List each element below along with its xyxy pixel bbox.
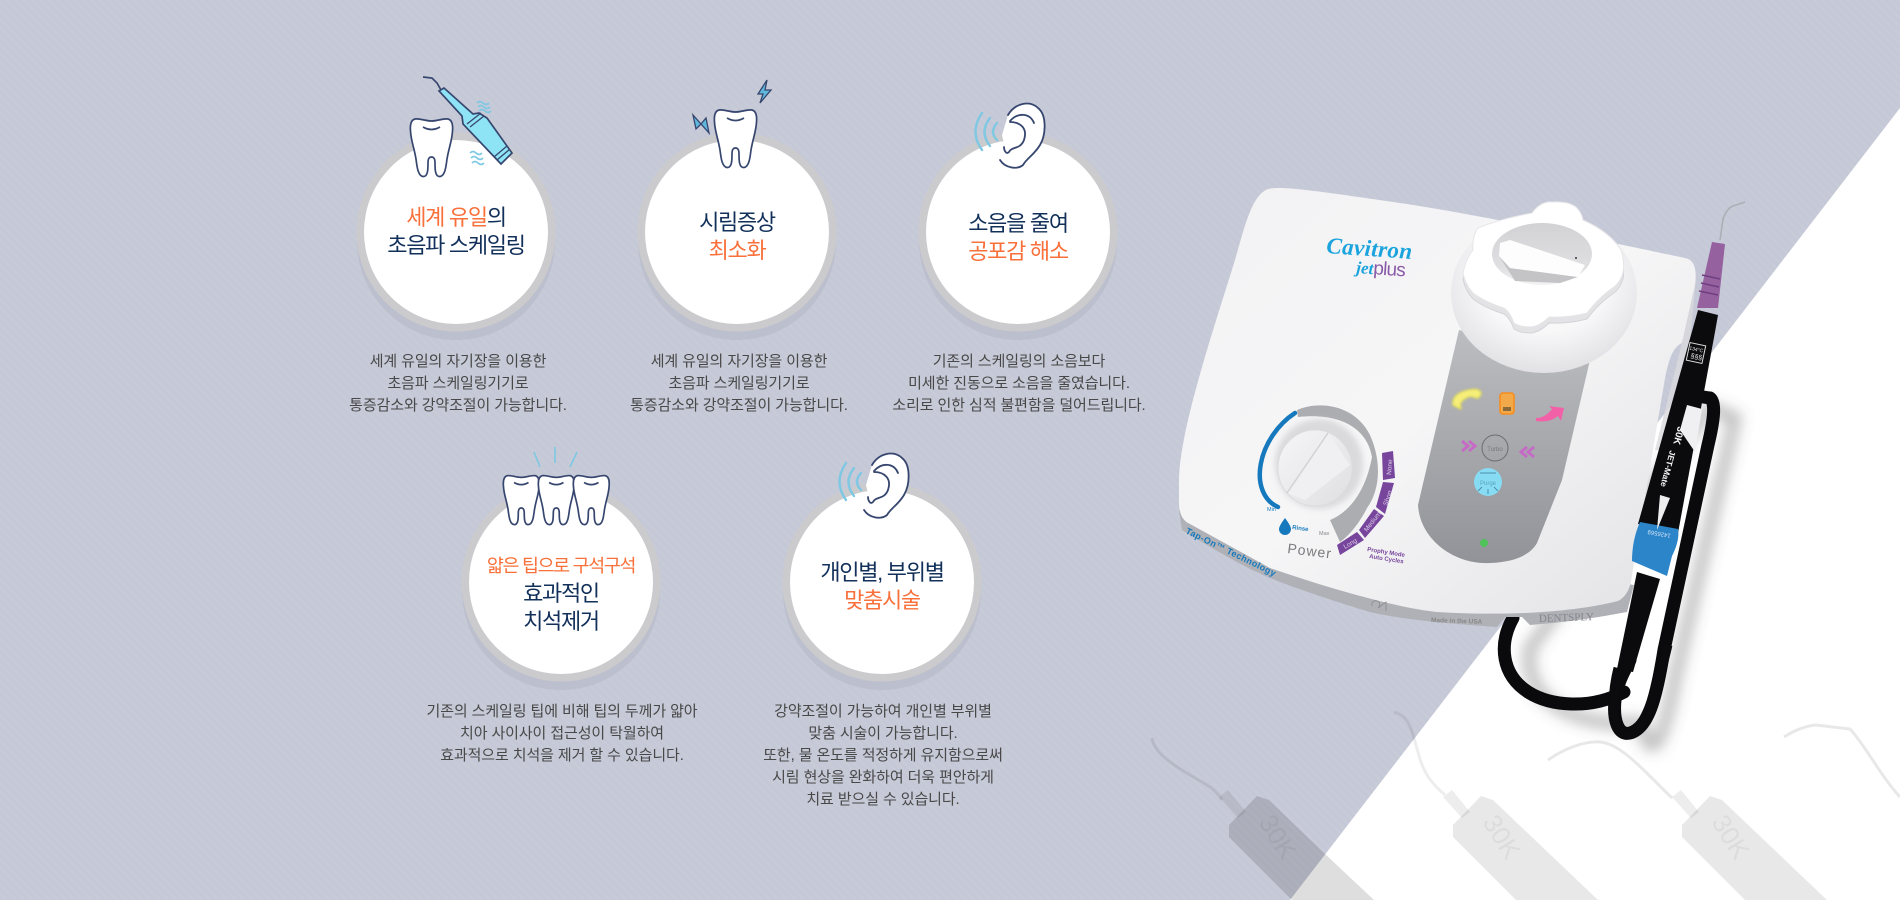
heading: circle 4: 효과적인 [523, 581, 599, 606]
text block: circle 1: 세계 유일의 자기장을 이용한 [370, 353, 546, 370]
power labels: Rinse [1292, 525, 1309, 533]
status indicators: Turbo [1487, 447, 1503, 453]
text block: circle 3: 기존의 스케일링의 소음보다 [933, 353, 1105, 370]
text block: circle 4 [426, 703, 698, 764]
segment labels: Medium [1363, 511, 1383, 533]
text block: circle 4: 기존의 스케일링 팁에 비해 팁의 두께가 얇아 [426, 703, 698, 720]
device base band [1179, 510, 1634, 627]
power labels: Auto Cycles [1369, 554, 1405, 566]
power labels [1184, 507, 1594, 626]
text block: circle 5: 맞춤 시술이 가능합니다. [808, 725, 958, 742]
text block: circle 5: 또한, 물 온도를 적정하게 유지함으로써 [763, 747, 1003, 764]
Cavitron logo: jetplus [1353, 257, 1406, 281]
power labels: Power [1287, 540, 1333, 561]
rear cable loop [1504, 396, 1714, 733]
segment labels: None [1386, 459, 1394, 475]
Cavitron logo: Cavitron [1326, 233, 1413, 264]
text block: circle 3: 미세한 진동으로 소음을 줄였습니다. [908, 375, 1130, 392]
knob handle [1499, 240, 1585, 283]
heading: circle 2 [699, 210, 776, 263]
circle 4 badge [462, 482, 660, 690]
heading: circle 3: 공포감 해소 [968, 239, 1068, 264]
power labels: Tap-On™ Technology [1184, 526, 1278, 578]
icon: ear with sound waves 2 [840, 454, 909, 518]
scaler 3: 30K [1706, 809, 1756, 865]
text block: circle 3: 소리로 인한 심적 불편함을 덜어드립니다. [892, 397, 1146, 414]
scaler 2 [1394, 712, 1598, 900]
heading: circle 5 [820, 560, 944, 613]
heading: circle 5: 맞춤시술 [844, 588, 920, 613]
circle 2 badge [638, 132, 836, 340]
power labels: Made in the USA [1431, 617, 1483, 626]
text block: circle 5: 치료 받으실 수 있습니다. [806, 791, 960, 808]
icon: tooth and scaler [410, 77, 512, 177]
text block: circle 4: 치아 사이사이 접근성이 탁월하여 [460, 725, 664, 742]
segment labels [1342, 459, 1394, 551]
text block: circle 3 [892, 353, 1146, 414]
heading: circle 1: 초음파 스케일링 [387, 233, 525, 258]
handpiece [1613, 202, 1745, 735]
circle 3 badge [918, 132, 1118, 340]
power dial [1275, 419, 1363, 509]
text block: circle 2: 통증감소와 강약조절이 가능합니다. [630, 397, 848, 414]
ghost scaler tips at bottom [1152, 712, 1900, 900]
knob skirt [1463, 208, 1624, 333]
right side translucent edge [1655, 270, 1697, 450]
grey control panel [1418, 330, 1590, 563]
heading: circle 4: 얇은 팁으로 구석구석 [487, 555, 635, 576]
text block: circle 1 [349, 353, 567, 414]
heading: circle 3: 소음을 줄여 [968, 211, 1068, 236]
Cavitron logo [1326, 233, 1413, 281]
text block: circle 2 [630, 353, 848, 414]
circle 1 badge [356, 132, 556, 340]
device body [1179, 188, 1696, 614]
knob inner well [1492, 223, 1592, 285]
text block: circle 1: 통증감소와 강약조절이 가능합니다. [349, 397, 567, 414]
heading: circle 2: 최소화 [709, 238, 765, 263]
scaler 3 [1548, 742, 1827, 900]
handpiece: §§§ [1690, 353, 1703, 362]
device: Cavitron Jet Plus [1179, 188, 1745, 735]
text block: circle 5: 시림 현상을 완화하여 더욱 편안하게 [772, 769, 994, 786]
heading: circle 5: 개인별, 부위별 [820, 560, 944, 585]
scaler 2: 30K [1477, 809, 1527, 865]
heading: circle 4: 치석제거 [523, 609, 599, 634]
knob [1463, 202, 1624, 327]
text block: circle 4: 효과적으로 치석을 제거 할 수 있습니다. [440, 747, 684, 764]
heading: circle 4 [487, 555, 635, 634]
heading: circle 1 [387, 205, 525, 258]
heading: circle 1: 세계 유일의 [406, 205, 506, 230]
handpiece: 30K [1670, 425, 1686, 447]
power labels: DENTSPLY [1539, 611, 1594, 625]
scaler 1 [1152, 738, 1374, 900]
collar around knob [1451, 213, 1637, 373]
segment labels: Long [1342, 537, 1359, 551]
power ring [1260, 405, 1378, 542]
text block: circle 2: 세계 유일의 자기장을 이용한 [651, 353, 827, 370]
icon: three teeth [503, 447, 609, 525]
scaler 1: 30K [1253, 809, 1303, 865]
cable and handpiece shadow [1529, 408, 1735, 745]
power labels: Prophy Mode [1367, 547, 1406, 559]
heading: circle 3 [968, 211, 1068, 264]
text block: circle 5 [763, 703, 1003, 808]
icon: ear with sound waves [976, 104, 1045, 168]
heading: circle 2: 시림증상 [699, 210, 775, 235]
status indicators: Purge [1480, 481, 1497, 487]
icon: tooth with lightning [693, 80, 771, 168]
power labels: Max [1319, 531, 1330, 537]
text block: circle 1: 초음파 스케일링기기로 [387, 375, 529, 392]
segment labels: Short [1382, 490, 1394, 507]
handpiece: JET-Mate [1658, 449, 1678, 488]
text block: circle 2: 초음파 스케일링기기로 [668, 375, 810, 392]
status indicators [1453, 390, 1564, 547]
circle 5 badge [782, 482, 982, 690]
purple auto cycle segments [1337, 451, 1395, 555]
text block: circle 5: 강약조절이 가능하여 개인별 부위별 [774, 703, 992, 720]
handpiece: 1426569 [1647, 528, 1671, 538]
power labels: Min [1267, 507, 1276, 513]
handpiece: 134°C [1689, 346, 1704, 354]
scaler 4 tip [1784, 725, 1900, 797]
